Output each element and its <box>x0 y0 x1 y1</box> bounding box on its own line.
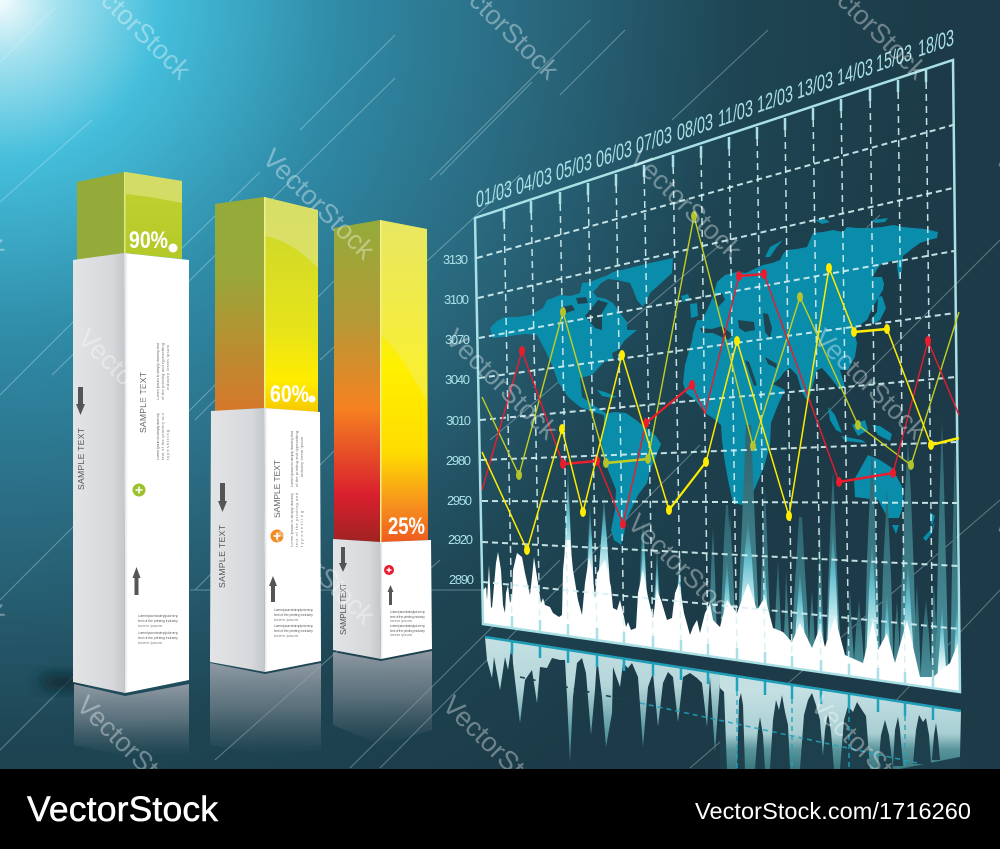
label 90%: 90% <box>129 227 168 254</box>
watermarks: VectorStock <box>622 508 746 631</box>
arrow down <box>339 547 347 572</box>
date axis labels: 04/03 <box>516 163 552 201</box>
value axis labels: 3040 <box>445 372 470 387</box>
top ticks <box>504 70 926 222</box>
date axis labels: 12/03 <box>757 81 793 119</box>
plus icon orange <box>270 530 284 542</box>
yellow line series <box>482 263 959 555</box>
watermarks: VectorStock <box>805 690 929 813</box>
tiny copy lower: Lorem Ipsum is simply dummy <box>138 613 178 618</box>
arrow down <box>76 387 85 415</box>
arrow up <box>132 567 140 595</box>
value axis labels: 3100 <box>444 292 469 307</box>
reflected dashed grid <box>640 691 917 769</box>
tiny copy lower <box>274 607 313 638</box>
sample text left: SAMPLE TEXT <box>76 427 86 490</box>
sample text right: SAMPLE TEXT <box>138 371 148 433</box>
sample text left: SAMPLE TEXT <box>339 583 348 635</box>
percent dot <box>168 244 178 252</box>
tiny copy lower: lorem ipsum <box>138 640 163 645</box>
reflection right part <box>720 674 961 769</box>
tiny copy lower: lorem ipsum <box>390 633 412 637</box>
tiny copy upper <box>155 342 170 460</box>
tiny copy lower: text of the printing industry <box>274 628 313 633</box>
bar 2 white box <box>210 408 321 672</box>
horizontal dashed grid <box>477 125 960 629</box>
tiny copy upper: typesetting <box>299 511 304 547</box>
white spectrum <box>483 540 960 692</box>
tiny copy upper: Lorem Ipsum is simply dummy text <box>289 430 294 487</box>
date axis labels: 01/03 <box>476 176 512 214</box>
tiny copy lower: Lorem Ipsum is simply dummy <box>274 623 313 628</box>
tiny copy lower <box>390 610 425 637</box>
tiny copy lower: text of the printing industry <box>138 635 178 640</box>
islands: UK, Iceland, arctic, Japan, Indonesia, Australia, NZ <box>690 303 698 318</box>
glowing spectrum cones <box>564 484 958 674</box>
tiny copy upper: Lorem Ipsum is simply dummy <box>289 493 294 547</box>
tiny copy lower: text of the printing industry <box>390 629 425 633</box>
watermarks: VectorStock <box>437 690 561 813</box>
tiny copy lower: lorem ipsum <box>138 623 163 628</box>
tiny copy upper: text of the printing and <box>160 413 165 460</box>
reflected dark grid <box>520 677 640 703</box>
bar 3 reflection <box>333 651 432 745</box>
tiny copy lower: Lorem Ipsum is simply dummy <box>138 630 178 635</box>
date axis labels: 14/03 <box>837 54 873 92</box>
bar 1 reflection <box>74 684 189 756</box>
olive line series <box>482 211 959 480</box>
tiny copy upper: of the printing and typesetting <box>160 343 165 400</box>
tiny copy upper: Lorem Ipsum is simply dummy text <box>155 342 160 400</box>
date axis labels: 18/03 <box>918 25 954 63</box>
South America <box>601 412 661 545</box>
tiny copy lower: Lorem Ipsum is simply dummy <box>274 607 313 612</box>
chart frame <box>475 60 960 692</box>
label 60%: 60% <box>270 381 309 408</box>
arrow down <box>218 483 227 512</box>
bar 3 colour column <box>334 220 428 542</box>
watermarks: VectorStock <box>624 143 748 266</box>
tiny copy upper: text of the printing and <box>294 493 299 547</box>
tiny copy upper: typesetting <box>165 430 170 460</box>
value axis labels: 2920 <box>448 532 473 547</box>
tiny copy lower: text of the printing industry <box>138 618 178 623</box>
teal spectrum spikes <box>563 420 960 690</box>
reflection dark teeth <box>720 688 961 769</box>
Eurasia and Africa <box>683 225 938 505</box>
dark seas on map <box>562 293 777 386</box>
bar 1 shadow <box>38 674 86 690</box>
chart reflection <box>485 637 961 769</box>
sample text left: SAMPLE TEXT <box>217 524 227 588</box>
bar 2: 60% <box>210 197 321 755</box>
chart panel <box>443 25 960 695</box>
tiny copy upper: industry lorem ipsum <box>299 436 304 477</box>
Caribbean islands <box>597 390 617 398</box>
date axis labels: 08/03 <box>677 109 713 147</box>
reflection left part <box>485 637 720 763</box>
sample text right: SAMPLE TEXT <box>272 459 282 518</box>
plus icon green <box>132 484 146 496</box>
value axis labels: 2950 <box>447 493 472 508</box>
tiny copy lower: lorem ipsum <box>274 633 299 638</box>
bar 2 colour column <box>215 197 318 412</box>
watermarks: VectorStock <box>808 323 932 446</box>
world map <box>490 218 938 545</box>
tiny copy lower: text of the printing industry <box>390 615 425 619</box>
watermarks: VectorStock <box>440 323 564 446</box>
tiny copy lower: lorem ipsum <box>274 617 299 622</box>
tiny copy upper <box>289 430 304 547</box>
label 25%: 25% <box>388 513 425 540</box>
arrow up <box>388 585 394 605</box>
spectrum area <box>483 420 960 695</box>
tiny copy upper: industry lorem ipsum <box>165 344 170 390</box>
footer image id: VectorStock.com/1716260 <box>695 798 971 824</box>
date axis labels: 05/03 <box>556 149 592 187</box>
value axis labels: 2980 <box>446 453 471 468</box>
bar 1: 90% <box>38 172 189 756</box>
North America and Greenland <box>490 258 673 417</box>
date axis labels: 15/03 <box>876 40 912 78</box>
footer brand: VectorStock <box>27 789 218 829</box>
watermarks: VectorStock <box>71 690 195 813</box>
bottom ticks <box>512 616 933 688</box>
bar 1 green cap <box>77 172 182 260</box>
arrow up <box>269 576 277 602</box>
value axis labels: 3010 <box>446 413 471 428</box>
date axis labels: 07/03 <box>636 122 672 160</box>
bar 2 reflection <box>210 663 321 755</box>
value axis labels: 3070 <box>445 332 470 347</box>
bar 1 white box <box>73 253 189 693</box>
watermarks: VectorStock <box>257 508 381 631</box>
reflection edge strip <box>485 637 961 711</box>
value axis labels <box>443 252 474 587</box>
red line series <box>482 269 959 529</box>
bar 3 white box <box>333 539 432 659</box>
reflected grid ticks <box>512 642 933 720</box>
tiny copy lower: Lorem Ipsum is simply dummy <box>390 610 425 614</box>
tiny copy lower: text of the printing industry <box>274 612 313 617</box>
tiny copy upper: of the printing and typesetting <box>294 431 299 487</box>
percent dot <box>308 396 316 402</box>
bar 3: 25% <box>333 220 432 745</box>
plus icon red <box>384 565 394 575</box>
date axis labels: 06/03 <box>596 136 632 174</box>
value axis labels: 2890 <box>449 572 474 587</box>
tiny copy lower: lorem ipsum <box>390 619 412 623</box>
vertical dashed grid <box>504 70 933 688</box>
tiny copy upper: Lorem Ipsum is simply dummy <box>155 413 160 460</box>
date axis labels: 13/03 <box>797 67 833 105</box>
watermarks: VectorStock <box>72 323 196 446</box>
watermarks: VectorStock <box>257 143 381 266</box>
date axis labels <box>476 25 954 214</box>
tiny copy lower: Lorem Ipsum is simply dummy <box>390 624 425 628</box>
date axis labels: 11/03 <box>718 95 753 133</box>
value axis labels: 3130 <box>443 252 468 267</box>
footer band <box>0 769 1000 849</box>
tiny copy lower <box>138 613 178 645</box>
